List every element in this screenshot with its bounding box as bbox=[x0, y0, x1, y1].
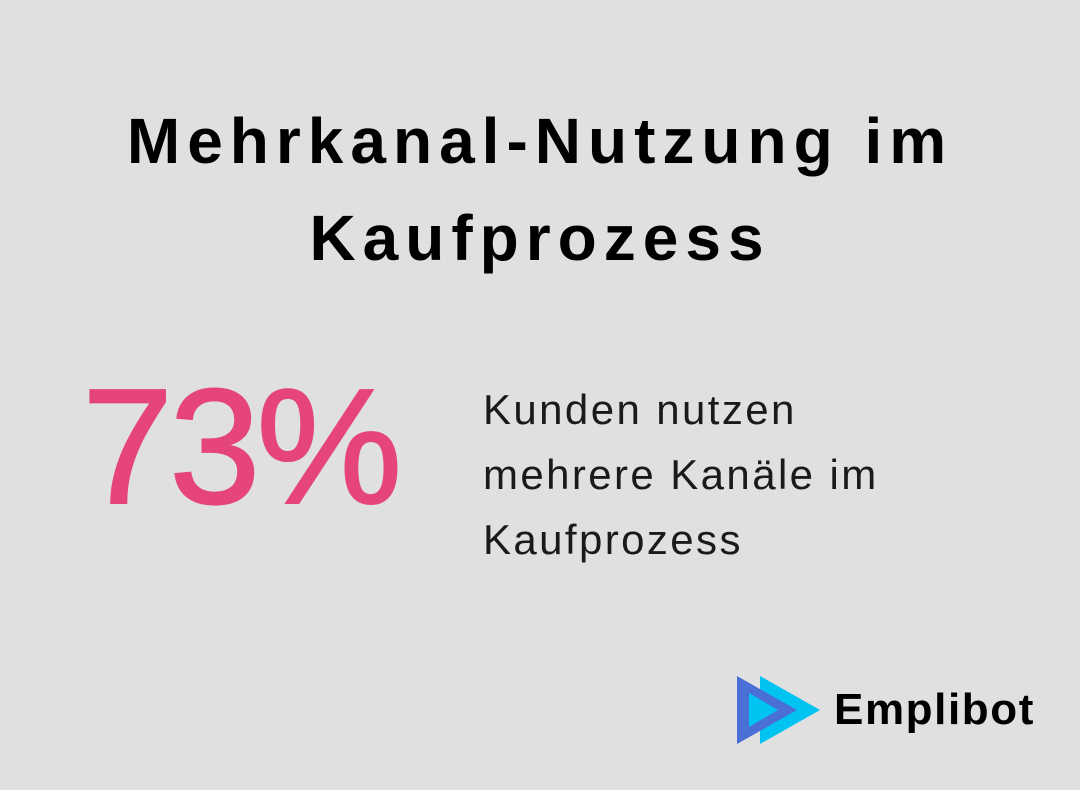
stat description: mehrere Kanäle im bbox=[483, 451, 879, 498]
title: Kaufprozess bbox=[309, 202, 771, 274]
title bbox=[127, 105, 953, 274]
logo: Emplibot bbox=[737, 676, 1035, 744]
title: Mehrkanal-Nutzung im bbox=[127, 105, 953, 177]
stat description bbox=[483, 386, 879, 563]
big stat number: 73% bbox=[82, 355, 398, 538]
stat description: Kunden nutzen bbox=[483, 386, 797, 433]
icon: play triangles bbox=[737, 676, 820, 744]
stat description: Kaufprozess bbox=[483, 516, 743, 563]
logo text: Emplibot bbox=[834, 685, 1035, 734]
